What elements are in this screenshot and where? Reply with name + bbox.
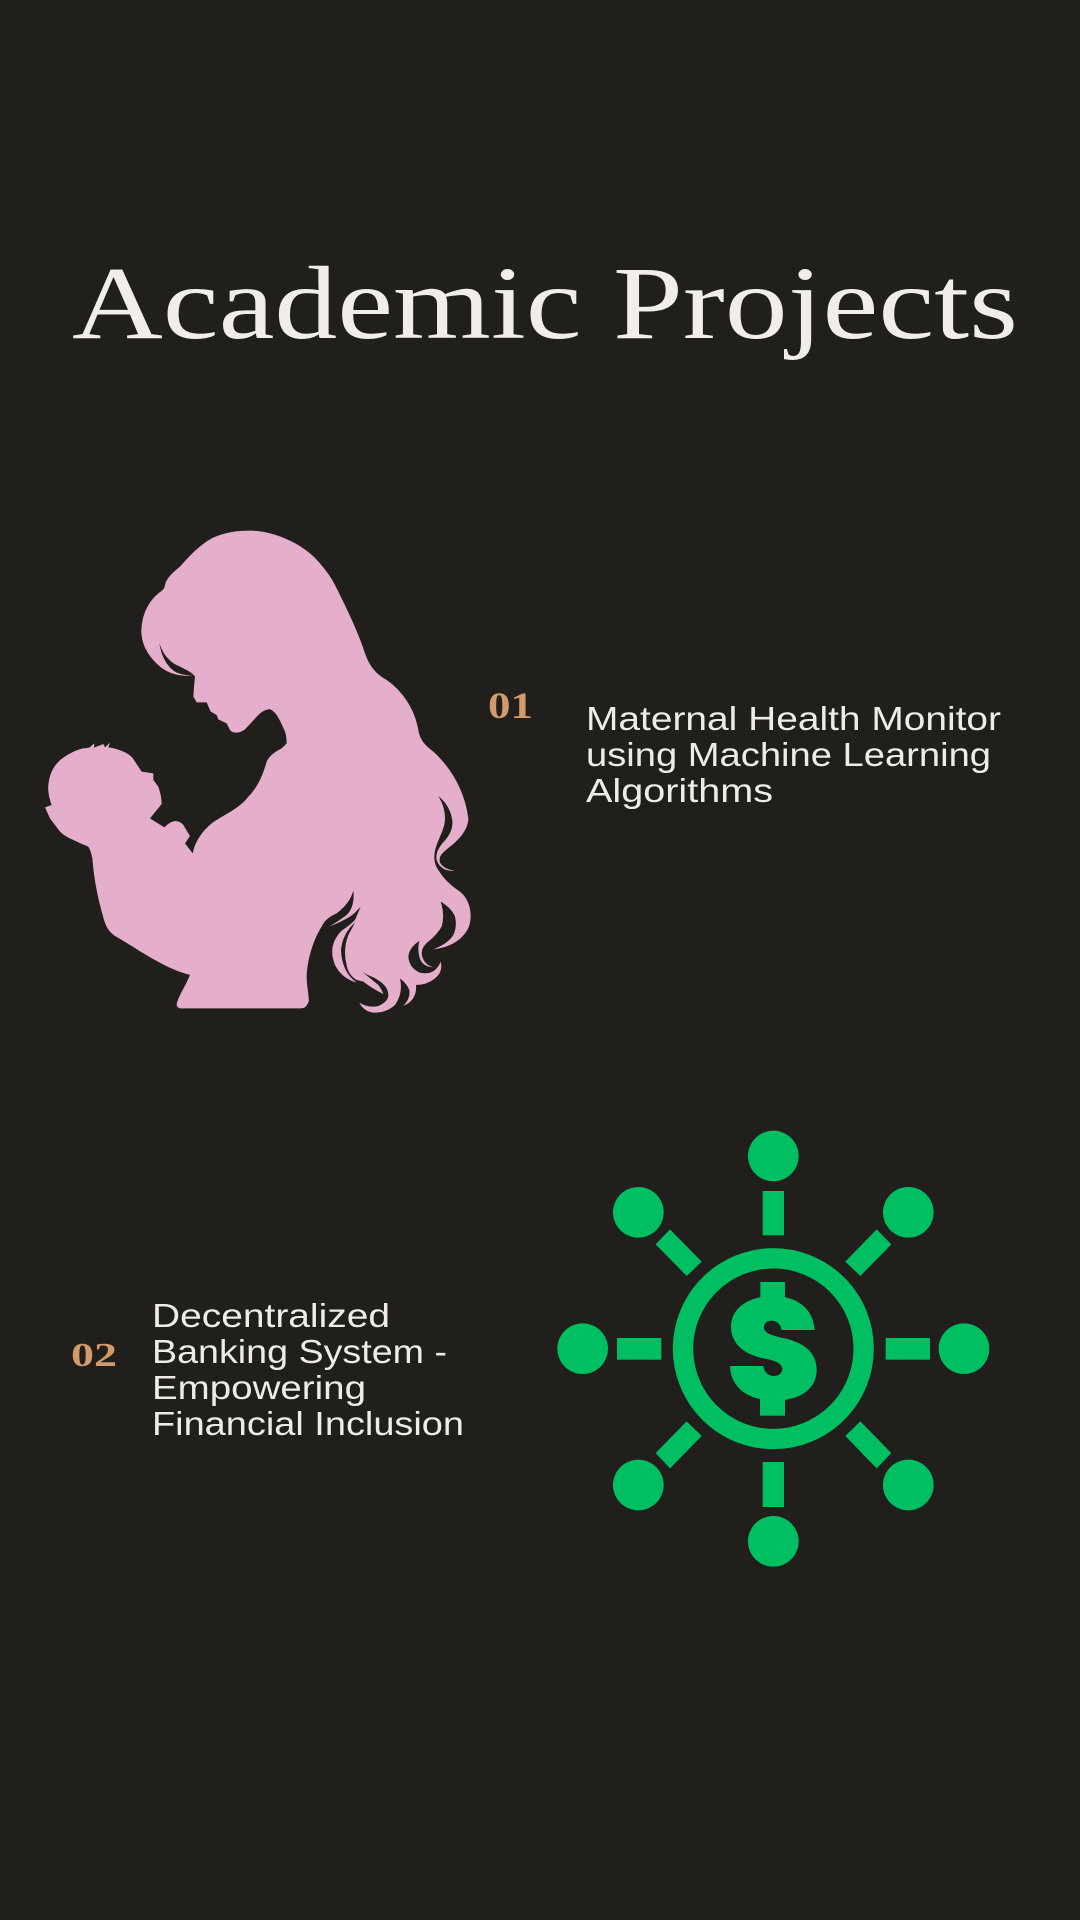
text block: project 2: Decentralized [152, 1297, 390, 1334]
text block: project 1: Algorithms [586, 772, 773, 809]
number 01: 01 [488, 686, 533, 727]
text block: project 2 [152, 1297, 464, 1442]
text block: project 1 [586, 700, 1001, 809]
text block: project 2: Empowering [152, 1369, 366, 1406]
text block: project 2: Banking System - [152, 1333, 447, 1370]
number 02: 02 [71, 1337, 117, 1374]
title: Academic Projects [72, 246, 1018, 361]
icon: mother holding baby silhouette [45, 531, 471, 1013]
text block: project 2: Financial Inclusion [152, 1405, 464, 1442]
text block: project 1: Maternal Health Monitor [586, 700, 1001, 737]
icon: decentralized banking network with dollar [557, 1131, 989, 1567]
text block: project 1: using Machine Learning [586, 736, 991, 773]
